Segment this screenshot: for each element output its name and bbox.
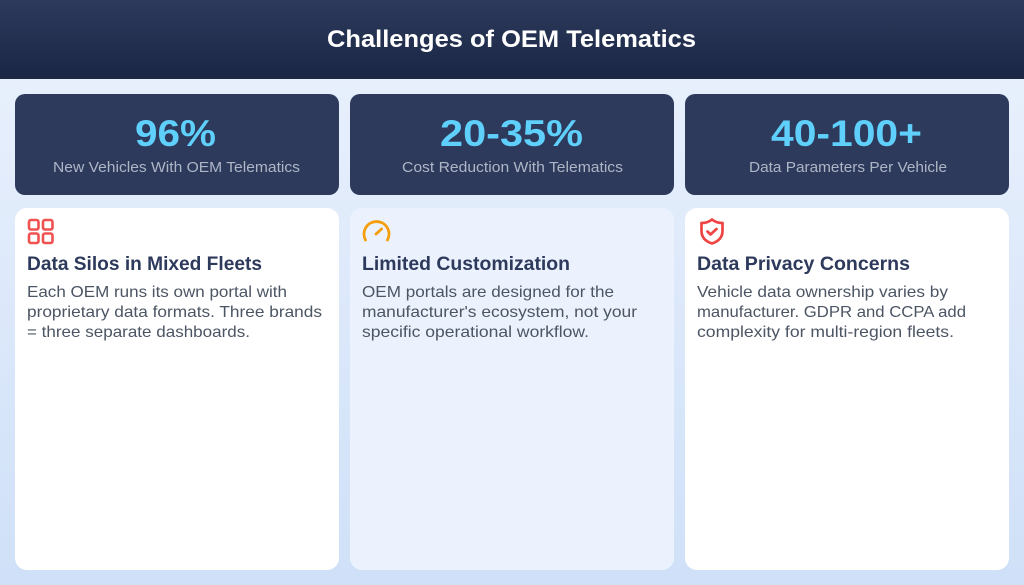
body text: Vehicle data ownership varies by (697, 284, 948, 301)
stat value: 20-35% (440, 113, 583, 154)
icon: gauge (364, 222, 389, 240)
body text (27, 284, 322, 341)
stat label: New Vehicles With OEM Telematics (53, 160, 300, 176)
panel: limited customization (350, 208, 674, 570)
body text: proprietary data formats. Three brands (27, 304, 322, 321)
panel: data silos (15, 208, 339, 570)
body text: OEM portals are designed for the (362, 284, 614, 301)
stat label: Data Parameters Per Vehicle (749, 160, 947, 176)
body text (362, 284, 637, 341)
body text: = three separate dashboards. (27, 324, 250, 341)
body text (697, 284, 966, 341)
heading: Data Silos in Mixed Fleets (27, 253, 262, 275)
stat card: 40-100+ (685, 94, 1009, 195)
icon: grid (29, 220, 52, 243)
stat value: 40-100+ (771, 113, 922, 154)
heading: Limited Customization (362, 253, 570, 275)
body text: Each OEM runs its own portal with (27, 284, 287, 301)
stat card: 96% (15, 94, 339, 195)
title: Challenges of OEM Telematics (327, 26, 696, 53)
header banner (0, 0, 1024, 79)
stat card: 20-35% (350, 94, 674, 195)
heading: Data Privacy Concerns (697, 253, 910, 275)
panel: data privacy (685, 208, 1009, 570)
body text: specific operational workflow. (362, 324, 589, 341)
body text: manufacturer. GDPR and CCPA add (697, 304, 966, 321)
icon: shield check (702, 220, 722, 244)
body text: complexity for multi-region fleets. (697, 324, 954, 341)
stat label: Cost Reduction With Telematics (402, 160, 623, 176)
body text: manufacturer's ecosystem, not your (362, 304, 637, 321)
stat value: 96% (135, 113, 216, 154)
